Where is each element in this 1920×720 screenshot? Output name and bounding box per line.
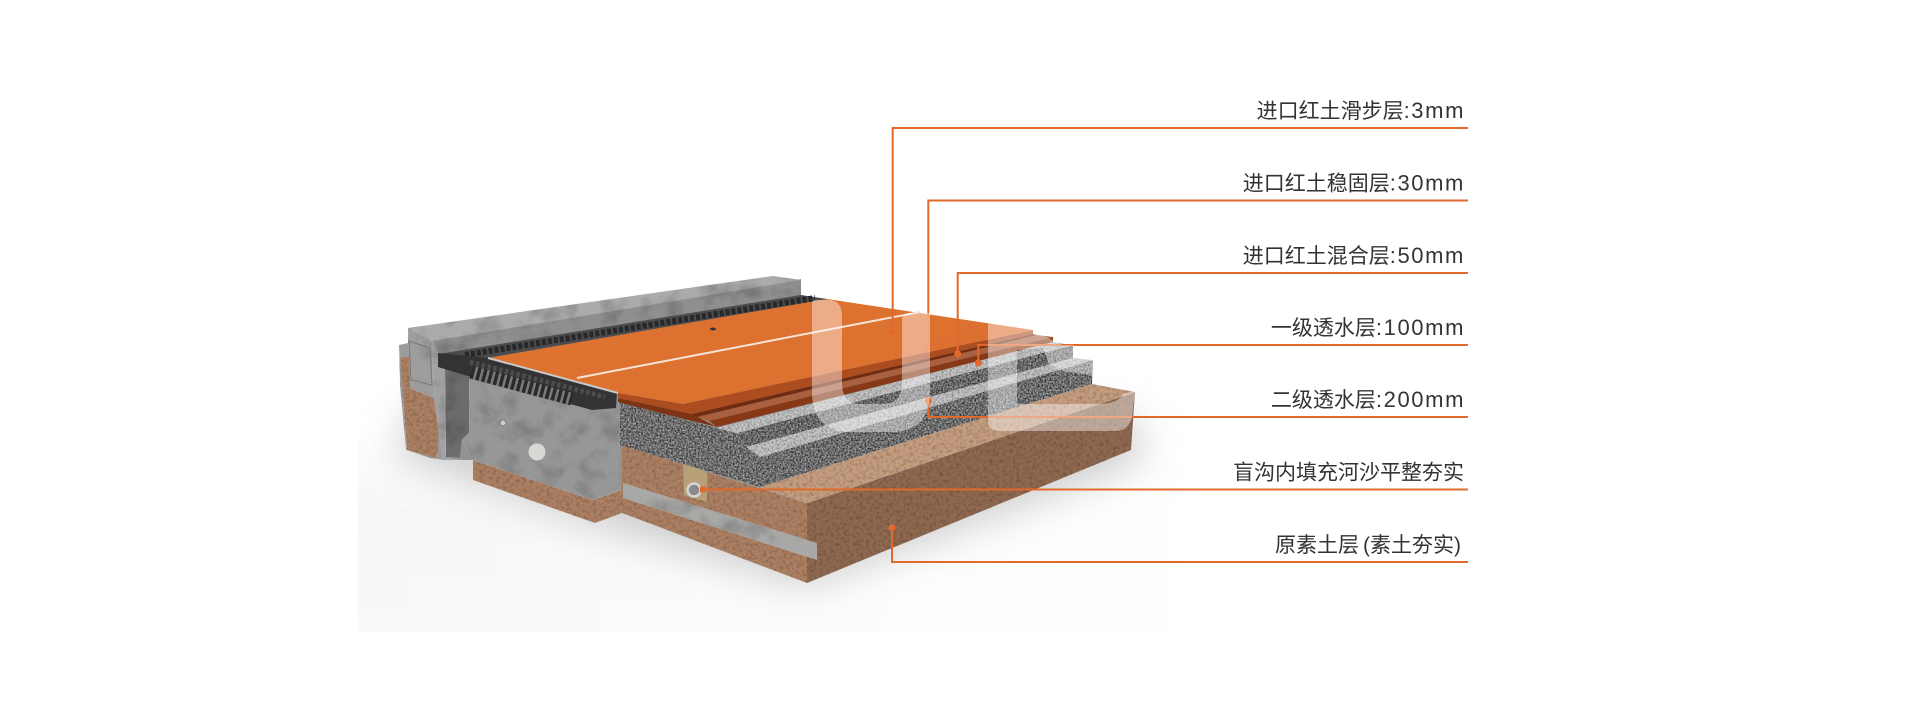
front drain grate	[438, 353, 617, 410]
red clay mix layer 50mm	[618, 335, 1053, 427]
callout: 二级透水层	[925, 387, 1468, 417]
callout: 进口红土混合层	[954, 243, 1468, 358]
callout: 进口红土稳固层	[925, 170, 1468, 352]
blind drain with pipe	[683, 463, 707, 502]
concrete band	[623, 483, 817, 560]
soil front face	[807, 392, 1135, 583]
leader lines and labels	[700, 98, 1468, 562]
original soil layer	[622, 384, 1135, 583]
watermark letter E	[988, 322, 1135, 431]
small fitting	[500, 420, 506, 426]
callout: 盲沟	[700, 462, 1468, 492]
callout: 一级透水层	[975, 315, 1468, 366]
watermark letter U	[812, 300, 930, 432]
callout: 原素土层: 原素土层(素土夯实)	[1275, 534, 1461, 557]
left soil block	[400, 357, 438, 458]
first permeable layer 100mm	[717, 342, 1073, 447]
watermark logo	[812, 300, 1135, 432]
callout: 进口红土滑步层	[889, 98, 1468, 335]
callout: 一级透水层: 一级透水层:100mm	[1271, 315, 1465, 340]
net post hole	[710, 328, 716, 330]
back drainage grate	[438, 295, 827, 358]
concrete drain wall	[445, 368, 620, 500]
callout: 二级透水层: 二级透水层:200mm	[1271, 387, 1465, 412]
red clay top surface	[488, 299, 1033, 404]
callout: 原素土层	[888, 524, 1468, 562]
bolt	[528, 444, 546, 460]
concrete curb	[408, 276, 801, 460]
lower soil under wall	[473, 460, 622, 523]
grate trim	[488, 358, 618, 393]
white court line	[577, 312, 920, 378]
3D court cross-section model	[399, 276, 1135, 583]
callout: 盲沟: 盲沟内填充河沙平整夯实	[1233, 462, 1464, 484]
second permeable layer 200mm	[620, 358, 1093, 487]
callout: 进口红土滑步层: 进口红土滑步层:3mm	[1257, 98, 1465, 123]
callout: 进口红土混合层: 进口红土混合层:50mm	[1243, 243, 1465, 268]
curb end panel	[409, 341, 432, 385]
ground shadow	[358, 404, 1155, 606]
callout: 进口红土稳固层: 进口红土稳固层:30mm	[1243, 170, 1465, 196]
concrete base behind	[399, 343, 443, 460]
soil left face	[622, 445, 807, 583]
model underlay	[399, 276, 1135, 583]
red clay stabilizing layer 30mm	[618, 330, 1037, 417]
soil top face	[760, 384, 1135, 503]
